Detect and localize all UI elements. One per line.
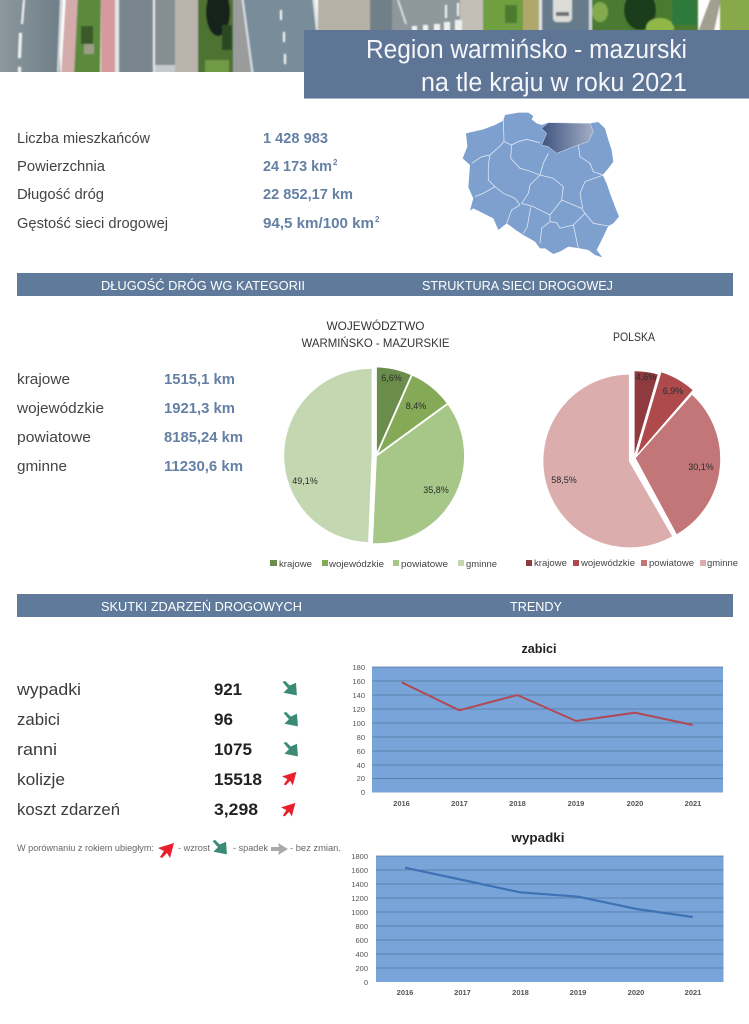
arrow legend note: - bez zmian.	[290, 843, 341, 853]
pie chart: województwo warmińsko-mazurskie: 49,1%	[292, 476, 318, 486]
section bar: road accident effects and trends: TRENDY	[510, 599, 562, 614]
accident statistics list: ranni	[17, 740, 57, 759]
road length by category: krajowe	[17, 372, 70, 388]
header photo: aerial view of road	[0, 0, 749, 77]
line chart: zabici: zabici	[522, 642, 556, 656]
line chart: zabici: 160	[352, 677, 365, 686]
arrow legend note: - spadek	[233, 843, 268, 853]
line chart: wypadki: 200	[355, 964, 368, 973]
key facts list: 22 852,17 km	[263, 186, 353, 203]
legend: Polska pie: gminne	[707, 558, 738, 569]
arrow legend note: - wzrost	[178, 843, 211, 853]
pie chart: województwo warmińsko-mazurskie: WARMIŃSKO - MAZURSKIE	[302, 335, 450, 350]
section bar: road accident effects and trends	[17, 594, 733, 617]
line chart: zabici: 120	[352, 705, 365, 714]
map of Poland with Warmia-Masuria highlighted	[463, 113, 619, 257]
line chart: wypadki: 1400	[351, 880, 368, 889]
pie chart: Polska: 6,9%	[663, 386, 683, 396]
legend: Polska pie: powiatowe	[649, 558, 694, 569]
road length by category	[16, 372, 243, 475]
line chart: wypadki: 1600	[351, 866, 368, 875]
line chart: zabici: 2019	[568, 799, 584, 808]
key facts list: 1 428 983	[263, 130, 328, 147]
accident statistics list: 1075	[214, 740, 252, 759]
key facts list: 2	[333, 158, 338, 167]
section bar: road length and structure	[17, 273, 733, 296]
key facts list: 2	[375, 215, 380, 224]
accident statistics list: wypadki	[16, 680, 81, 699]
road length by category: 8185,24 km	[164, 430, 243, 446]
line chart: zabici: 2018	[509, 799, 526, 808]
accident statistics list	[16, 680, 262, 819]
legend: województwo pie	[270, 559, 497, 570]
key facts list	[17, 130, 380, 232]
road length by category: 1921,3 km	[164, 401, 235, 417]
line chart: zabici: 40	[357, 761, 365, 770]
accident statistics list: 96	[214, 710, 233, 729]
key facts list: Gęstość sieci drogowej	[17, 215, 168, 232]
line chart: zabici: 180	[352, 663, 365, 672]
accident statistics list: zabici	[17, 710, 60, 729]
line chart: wypadki: 2020	[628, 988, 644, 997]
line chart: wypadki: 2017	[454, 988, 471, 997]
legend: Polska pie	[526, 558, 738, 569]
pie chart: Polska: 4,6%	[636, 372, 656, 382]
key facts list: Liczba mieszkańców	[17, 130, 150, 147]
line chart: zabici: 100	[352, 719, 365, 728]
section bar: road length and structure: STRUKTURA SIECI DROGOWEJ	[422, 278, 613, 293]
legend: województwo pie: wojewódzkie	[328, 559, 384, 570]
key facts list: Długość dróg	[17, 186, 104, 203]
road length by category: 1515,1 km	[164, 372, 235, 388]
line chart: wypadki: 2019	[570, 988, 586, 997]
section bar: road accident effects and trends: SKUTKI ZDARZEŃ DROGOWYCH	[101, 599, 302, 614]
icon: trend arrows per statistic	[281, 681, 298, 816]
line chart: wypadki: 2016	[397, 988, 413, 997]
line chart: zabici: 140	[352, 691, 365, 700]
key facts list: 24 173 km	[263, 158, 332, 175]
key facts list: Powierzchnia	[17, 158, 106, 175]
line chart: wypadki: 0	[364, 978, 368, 987]
arrow legend note	[17, 840, 341, 858]
accident statistics list: kolizje	[17, 770, 65, 789]
pie chart: Polska: POLSKA	[613, 330, 655, 344]
line chart: wypadki: 1200	[351, 894, 368, 903]
line chart: zabici: 0	[361, 788, 365, 797]
line chart: wypadki: 600	[355, 936, 368, 945]
accident statistics list: 921	[214, 680, 242, 699]
road length by category: 11230,6 km	[164, 459, 243, 475]
line chart: zabici: 2020	[627, 799, 643, 808]
title panel	[304, 30, 749, 99]
line chart: zabici	[352, 642, 723, 808]
legend: województwo pie: krajowe	[279, 559, 312, 570]
pie chart: Polska: 58,5%	[551, 475, 577, 485]
line chart: zabici: 2017	[451, 799, 468, 808]
line chart: wypadki: 400	[355, 950, 368, 959]
road length by category: gminne	[17, 459, 67, 475]
line chart: zabici: 2021	[685, 799, 701, 808]
line chart: zabici: 80	[357, 733, 365, 742]
accident statistics list: 3,298	[214, 800, 258, 819]
pie chart: województwo warmińsko-mazurskie: 6,6%	[381, 373, 402, 383]
line chart: wypadki: 800	[355, 922, 368, 931]
line chart: wypadki: 2018	[512, 988, 529, 997]
pie chart: województwo warmińsko-mazurskie	[283, 318, 465, 544]
pie chart: Polska: 30,1%	[688, 462, 714, 472]
line chart: wypadki: wypadki	[510, 830, 564, 845]
accident statistics list: koszt zdarzeń	[17, 800, 120, 819]
line chart: wypadki	[351, 830, 724, 997]
arrow legend note: W porównaniu z rokiem ubiegłym:	[17, 843, 154, 853]
pie chart: województwo warmińsko-mazurskie: 8,4%	[406, 401, 426, 411]
legend: województwo pie: powiatowe	[401, 559, 448, 570]
line chart: wypadki: 1800	[351, 852, 368, 861]
key facts list: 94,5 km/100 km	[263, 215, 374, 232]
line chart: zabici: 2016	[393, 799, 410, 808]
legend: Polska pie: krajowe	[534, 558, 567, 569]
section bar: road length and structure: DŁUGOŚĆ DRÓG WG KATEGORII	[101, 278, 305, 293]
legend: województwo pie: gminne	[466, 559, 497, 570]
title panel: na tle kraju w roku 2021	[421, 69, 687, 97]
pie chart: Polska	[543, 330, 721, 548]
legend: Polska pie: wojewódzkie	[580, 558, 635, 569]
line chart: zabici: 60	[357, 747, 365, 756]
line chart: wypadki: 2021	[685, 988, 701, 997]
pie chart: województwo warmińsko-mazurskie: 35,8%	[423, 485, 449, 495]
road length by category: powiatowe	[17, 430, 91, 446]
road length by category: wojewódzkie	[16, 401, 104, 417]
accident statistics list: 15518	[214, 770, 262, 789]
line chart: wypadki: 1000	[351, 908, 368, 917]
pie chart: województwo warmińsko-mazurskie: WOJEWÓDZTWO	[326, 318, 424, 333]
line chart: zabici: 20	[357, 774, 365, 783]
title panel: Region warmińsko - mazurski	[366, 36, 687, 64]
